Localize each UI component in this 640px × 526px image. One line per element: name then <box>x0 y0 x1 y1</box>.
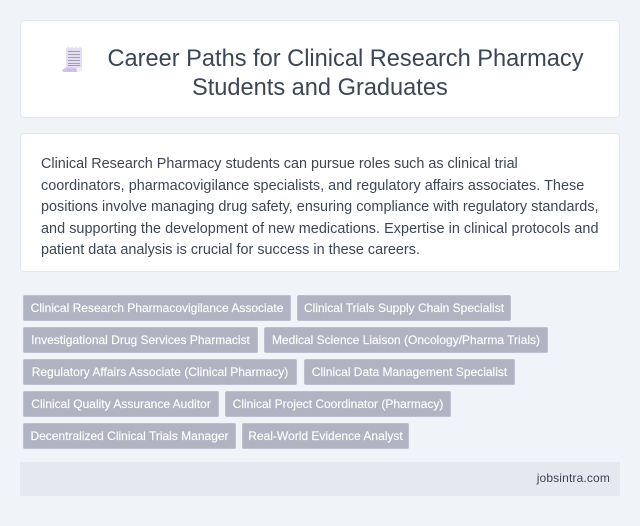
tag <box>23 391 219 417</box>
text block: description: positions involve managing drug safety, ensuring compliance with regulatory standards, <box>41 199 599 215</box>
tag <box>23 295 291 321</box>
tag <box>23 359 297 385</box>
text block: description: coordinators, pharmacovigilance specialists, and regulatory affairs associates. These <box>41 178 584 194</box>
tag: Real-World Evidence Analyst <box>248 429 403 443</box>
tag: Clinical Data Management Specialist <box>312 365 507 379</box>
footer bar <box>20 462 620 496</box>
tag: Clinical Quality Assurance Auditor <box>31 397 211 411</box>
text block: description <box>41 156 599 258</box>
panel: title card <box>20 20 620 118</box>
title <box>108 46 584 101</box>
text block: description: and supporting the development of new medications. Expertise in clinical protocols and <box>41 221 599 237</box>
tag <box>297 295 511 321</box>
tag: Medical Science Liaison (Oncology/Pharma Trials) <box>272 333 540 347</box>
tag: Clinical Project Coordinator (Pharmacy) <box>233 397 443 411</box>
tag: Clinical Research Pharmacovigilance Associate <box>31 301 283 315</box>
tag: Decentralized Clinical Trials Manager <box>30 429 229 443</box>
footer text: jobsintra.com <box>537 471 610 485</box>
tag: Investigational Drug Services Pharmacist <box>31 333 250 347</box>
title: Students and Graduates <box>192 75 448 101</box>
tag <box>23 327 258 353</box>
tag: Clinical Trials Supply Chain Specialist <box>304 301 504 315</box>
text block: description: patient data analysis is crucial for success in these careers. <box>41 242 420 258</box>
tag: Regulatory Affairs Associate (Clinical Pharmacy) <box>32 365 288 379</box>
icon: document scroll <box>62 47 82 72</box>
tag <box>225 391 451 417</box>
tag <box>242 423 409 449</box>
tag <box>264 327 548 353</box>
panel: description <box>20 133 620 272</box>
panel: career tags <box>23 295 548 449</box>
tag <box>304 359 515 385</box>
title: Career Paths for Clinical Research Pharmacy <box>108 46 584 72</box>
tag <box>23 423 236 449</box>
text block: description: Clinical Research Pharmacy students can pursue roles such as clinical trial <box>41 156 518 172</box>
